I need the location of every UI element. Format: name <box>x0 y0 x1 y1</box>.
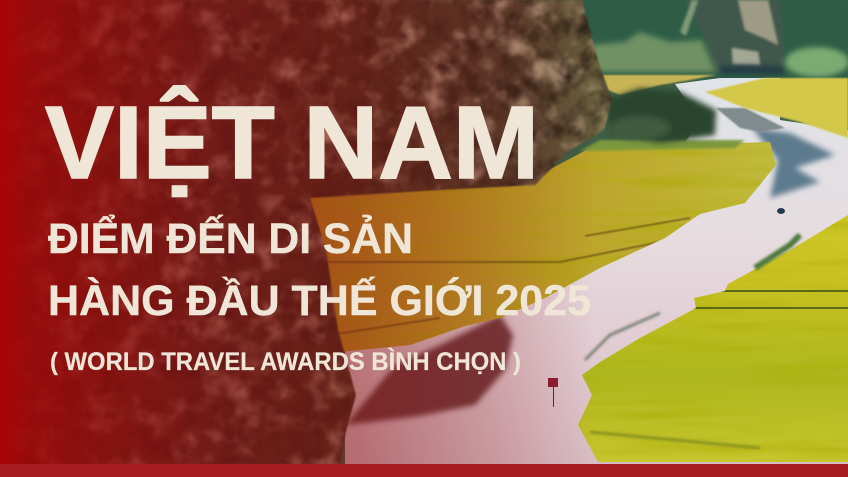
forested hill <box>30 0 612 464</box>
river <box>345 78 848 464</box>
river sign <box>548 378 558 407</box>
dark tree cluster <box>606 88 716 143</box>
middle rice field <box>300 140 780 355</box>
upper right rice field <box>705 78 848 138</box>
river shadow <box>345 315 513 425</box>
river bank reeds <box>755 235 800 268</box>
bright grass strip at field edge <box>580 140 745 151</box>
boat <box>777 208 785 214</box>
tree line behind far field <box>590 32 848 77</box>
river reflection: dark blue <box>752 128 835 198</box>
subtitle line 2: HÀNG ĐẦU THẾ GIỚI 2025 <box>48 276 591 325</box>
lower right rice field <box>578 215 848 462</box>
far rice field <box>602 75 716 95</box>
far bank reflection <box>716 108 785 132</box>
title: VIỆT NAM: VIỆT NAM <box>45 85 539 200</box>
distant green mountains <box>560 0 848 80</box>
limestone cliff <box>680 0 785 72</box>
bottom red bar <box>0 464 848 477</box>
source note: ( WORLD TRAVEL AWARDS BÌNH CHỌN ) <box>50 347 521 376</box>
subtitle line 1: ĐIỂM ĐẾN DI SẢN <box>48 214 413 263</box>
